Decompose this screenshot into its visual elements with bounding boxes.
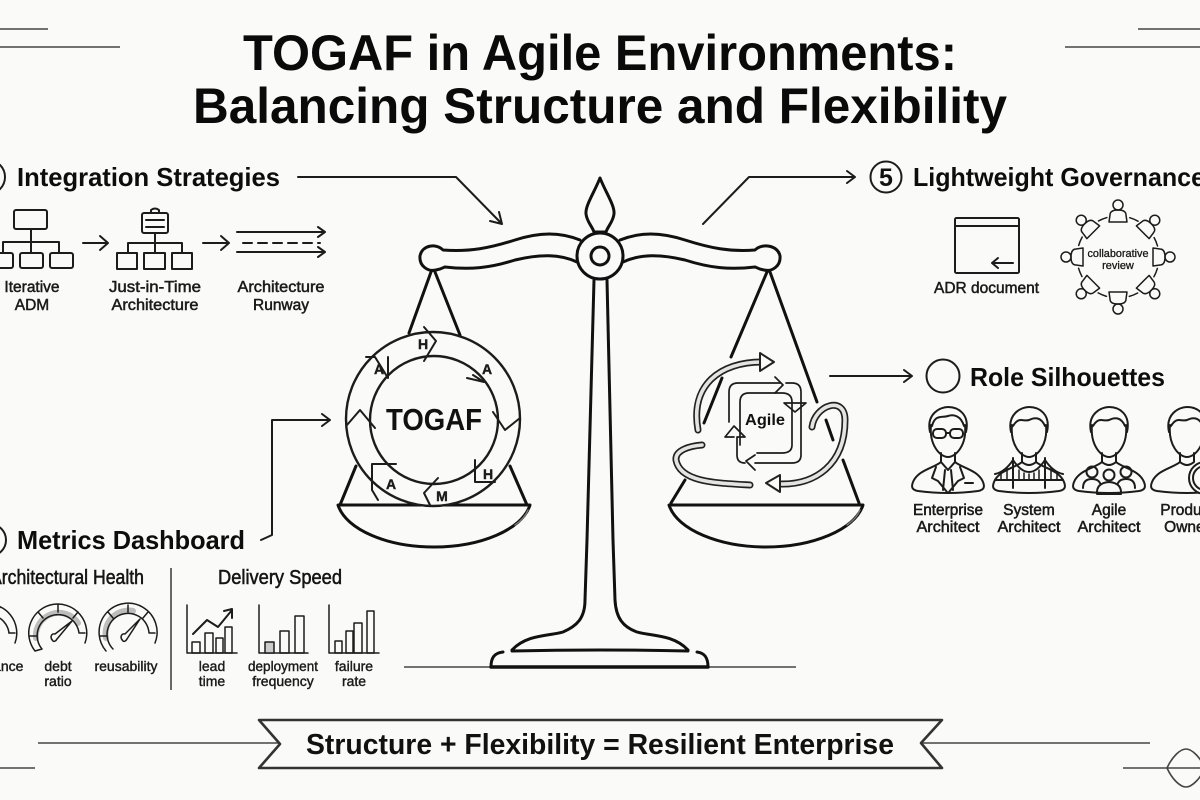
arrow: scale to lightweight governance <box>703 171 855 224</box>
scale pillar and base <box>491 280 708 667</box>
wheel phase letters: H <box>418 336 428 352</box>
chart labels: frequency <box>252 673 314 689</box>
chart labels: failure <box>335 658 373 674</box>
left pan and strings <box>338 272 530 547</box>
label: collaborative review: collaborative <box>1088 248 1148 260</box>
icon: collaborative review circle <box>1061 200 1175 314</box>
chart labels: rate <box>342 673 366 689</box>
label: ADR document: ADR document <box>934 280 1040 297</box>
chart labels <box>199 658 373 689</box>
icon: iterative ADM hierarchy <box>0 210 73 268</box>
label: iterative ADM: ADM <box>15 297 49 314</box>
gauge labels: reusability <box>94 658 158 674</box>
label: just-in-time architecture: Architecture <box>112 297 198 314</box>
TOGAF cycle wheel <box>346 327 520 506</box>
label: architecture runway: Runway <box>253 297 309 314</box>
banner text: Structure + Flexibility = Resilient Enterprise <box>306 729 894 761</box>
gauge labels: debt <box>44 658 72 674</box>
label: just-in-time architecture: Just-in-Time <box>109 279 201 296</box>
label: architecture runway: Architecture <box>238 279 324 296</box>
wheel phase letters: M <box>436 488 448 504</box>
arrow: metrics dashboard to scale <box>261 414 330 540</box>
label: collaborative review: review <box>1102 260 1134 272</box>
outer sweeping arrows <box>676 353 845 492</box>
arrow: integration strategies to scale <box>298 177 502 224</box>
gauge labels <box>0 658 158 689</box>
panel: metrics dashboard <box>0 524 379 690</box>
labels: role names: Agile <box>1092 502 1126 519</box>
labels: role names: Architect <box>1078 519 1141 536</box>
chart labels: time <box>199 673 225 689</box>
balance scale <box>338 178 863 667</box>
icon: enterprise architect <box>912 407 984 493</box>
heading: lightweight governance: 5 <box>879 164 893 192</box>
chart: lead time <box>187 605 237 653</box>
chart labels: lead <box>199 658 225 674</box>
wheel phase letters <box>374 336 493 504</box>
icon: ADR document <box>955 218 1019 273</box>
arrow: ADM to just-in-time <box>83 236 108 250</box>
label: iterative ADM: Iterative <box>4 279 60 296</box>
label: architecture runway <box>238 279 324 314</box>
banner <box>259 720 942 768</box>
icon: product owner <box>1151 407 1200 494</box>
panel: role silhouettes <box>912 360 1200 536</box>
wheel phase letters: H <box>483 466 493 482</box>
wheel phase letters: A <box>374 361 384 377</box>
scale beam <box>420 234 780 270</box>
label: just-in-time architecture <box>109 279 201 314</box>
chart: deployment frequency <box>259 605 308 653</box>
label: iterative ADM <box>4 279 60 314</box>
agile iteration loops <box>676 353 845 492</box>
wheel label: TOGAF <box>386 402 482 437</box>
panel: integration strategies <box>0 160 325 314</box>
labels: role names: Enterprise <box>913 502 983 519</box>
title: TOGAF in Agile Environments: <box>243 25 957 81</box>
arrow: scale to role silhouettes <box>830 370 912 382</box>
scale finial <box>586 178 614 232</box>
title <box>193 25 1007 134</box>
labels: role names: Architect <box>916 519 980 536</box>
wheel phase letters: A <box>482 361 492 377</box>
wheel phase letters: A <box>386 476 396 492</box>
wheel arrow segments <box>347 327 520 505</box>
gauge: reusability <box>99 603 157 651</box>
heading: metrics dashboard: Metrics Dashboard <box>17 525 245 555</box>
banner ribbon <box>259 720 942 768</box>
label: collaborative review <box>1088 248 1148 272</box>
icon: architecture runway <box>237 227 325 257</box>
heading: role silhouettes: Role Silhouettes <box>970 362 1165 392</box>
gauge: debt ratio <box>29 604 87 651</box>
wheel rings <box>346 332 520 506</box>
arrow: just-in-time to runway <box>203 236 229 250</box>
subheading: delivery speed: Delivery Speed <box>218 567 342 589</box>
right pan and strings <box>669 272 863 547</box>
panel: lightweight governance <box>870 162 1200 314</box>
labels: role names: System <box>1003 502 1055 519</box>
gauge: compliance <box>0 604 17 651</box>
icon: agile architect <box>1073 407 1145 494</box>
chart: failure rate <box>329 605 379 653</box>
agile label: Agile <box>745 412 785 429</box>
labels: role names <box>913 502 1200 536</box>
labels: role names: Architect <box>998 519 1061 536</box>
scale pivot <box>577 233 623 279</box>
inner square arrows <box>725 377 806 470</box>
heading: integration strategies: Integration Strategies <box>17 162 280 192</box>
title: Balancing Structure and Flexibility <box>193 78 1007 134</box>
chart labels: deployment <box>248 658 318 674</box>
icon: just-in-time hierarchy <box>117 208 192 269</box>
icon: system architect <box>993 407 1065 493</box>
gauge labels: ratio <box>44 673 72 689</box>
